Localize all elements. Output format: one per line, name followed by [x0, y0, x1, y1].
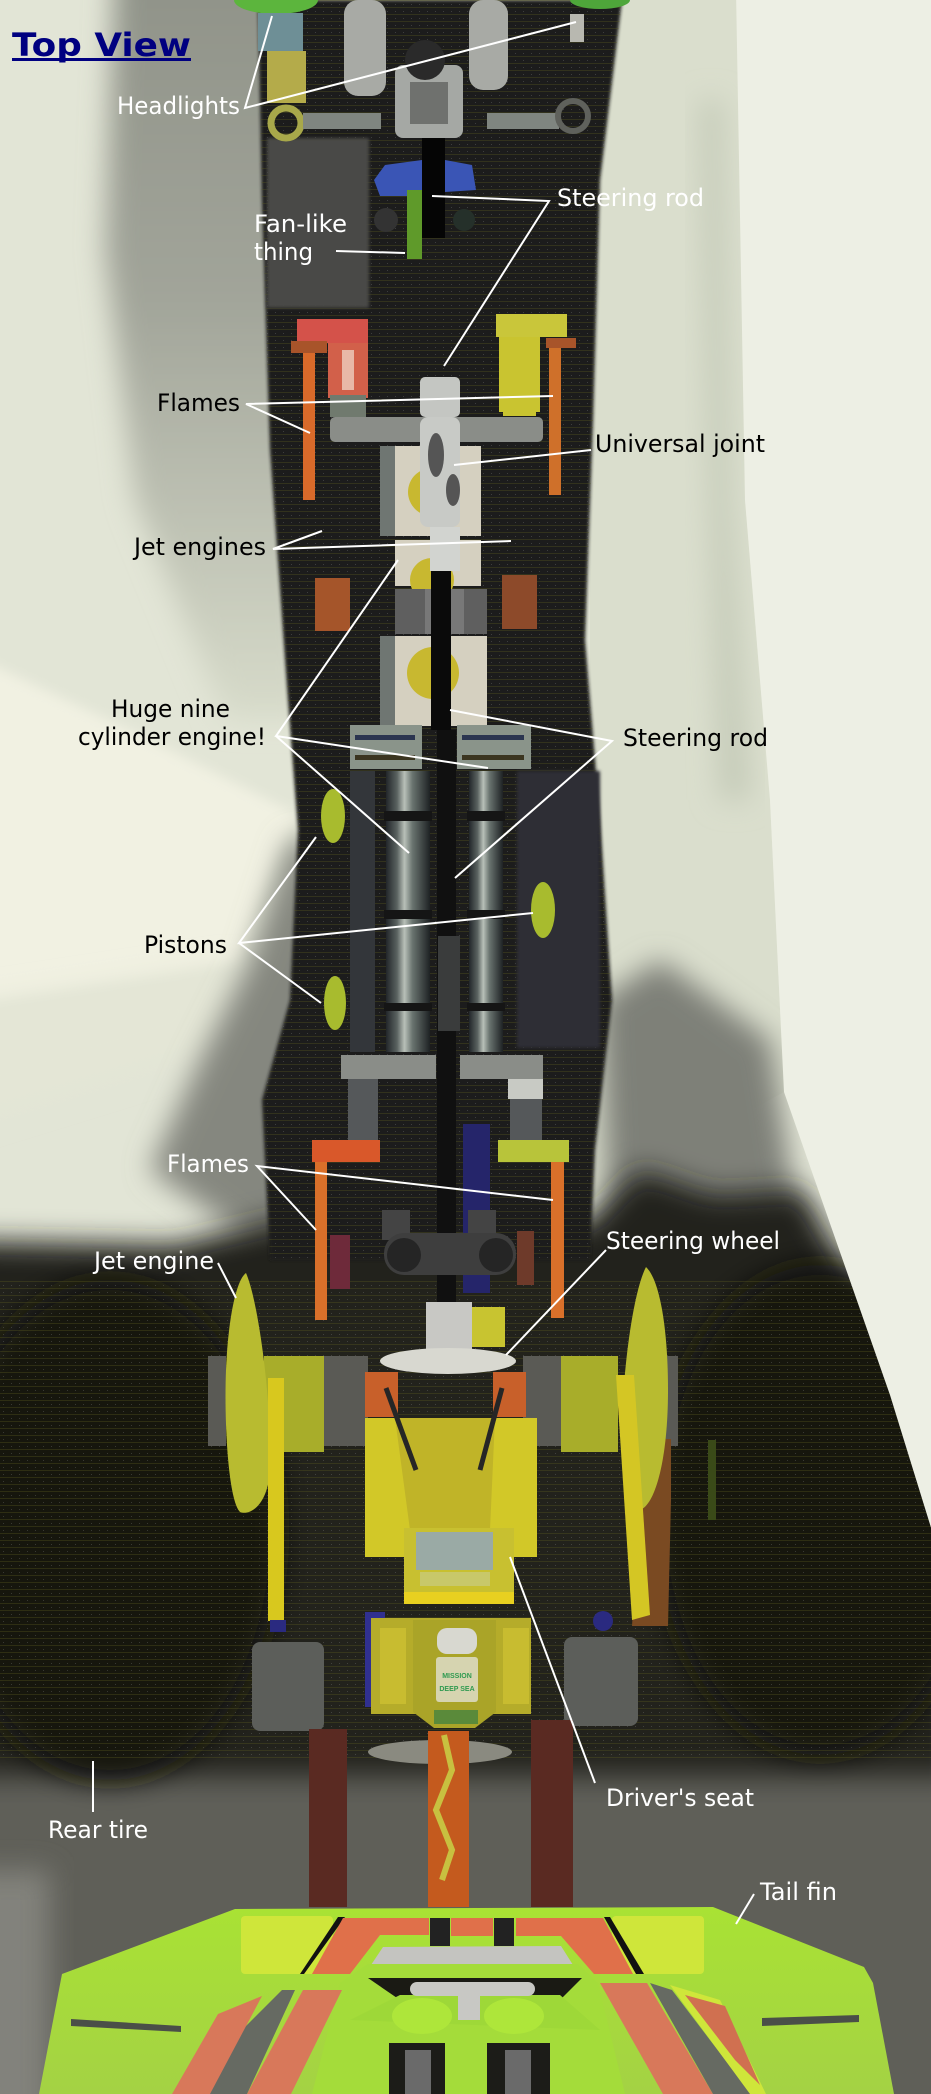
label: Huge nine cylinder engine: cylinder engine! [78, 723, 266, 751]
label: Steering wheel [506, 1227, 780, 1355]
label: Fan-like thing: Fan-like [254, 210, 347, 238]
label: Universal joint [454, 430, 765, 465]
label: Flames (rear): Flames [167, 1150, 249, 1178]
label: Universal joint: Universal joint [595, 430, 765, 458]
pistons [321, 789, 555, 1030]
label: Jet engine [92, 1247, 236, 1298]
label: Flames (front) [157, 389, 553, 433]
label: Rear tire [48, 1761, 148, 1844]
label: Rear tire: Rear tire [48, 1816, 148, 1844]
rear grey cylinders [252, 1637, 638, 1731]
vehicle chassis body [258, 0, 622, 1260]
driver's seat [365, 1372, 537, 1604]
rear engine mounts and flames [312, 1055, 569, 1320]
label: Steering wheel: Steering wheel [606, 1227, 780, 1255]
label: Fan-like thing [254, 210, 405, 266]
label: Steering rod (front) [432, 184, 704, 366]
side jet engines [208, 1267, 716, 1632]
rear control panel: DEEP SEA [439, 1686, 475, 1693]
label: Huge nine cylinder engine: Huge nine [111, 695, 230, 723]
rear control panel [365, 1612, 531, 1728]
label: Jet engines: Jet engines [132, 533, 266, 561]
rear control panel: MISSION [442, 1673, 472, 1680]
front suspension and headlights [234, 0, 630, 259]
label: Pistons [144, 837, 533, 1003]
label: Huge nine cylinder engine [78, 560, 488, 853]
nine cylinder engine [350, 725, 531, 1052]
label: Flames (front): Flames [157, 389, 240, 417]
label: Tail fin: Tail fin [759, 1878, 837, 1906]
title: Top View [12, 26, 191, 64]
label: Driver's seat [510, 1557, 754, 1812]
label: Headlights: Headlights [117, 92, 240, 120]
label: Fan-like thing: thing [254, 238, 313, 266]
label: Steering rod (middle) [450, 710, 768, 878]
front jet engines and flames [291, 314, 576, 631]
label: Flames (rear) [167, 1150, 553, 1230]
tail strips [309, 1720, 573, 1907]
label: Driver's seat: Driver's seat [606, 1784, 754, 1812]
label: Jet engine: Jet engine [92, 1247, 214, 1275]
label: Steering rod (middle): Steering rod [623, 724, 768, 752]
central engine blocks and universal joint [380, 377, 487, 1350]
label: Steering rod (front): Steering rod [557, 184, 704, 212]
label: Headlights [117, 16, 576, 120]
steering wheel [380, 1302, 516, 1374]
tail fin [39, 1907, 894, 2094]
label: Jet engines [132, 531, 511, 561]
label: Tail fin [736, 1878, 837, 1924]
label: Pistons: Pistons [144, 931, 227, 959]
